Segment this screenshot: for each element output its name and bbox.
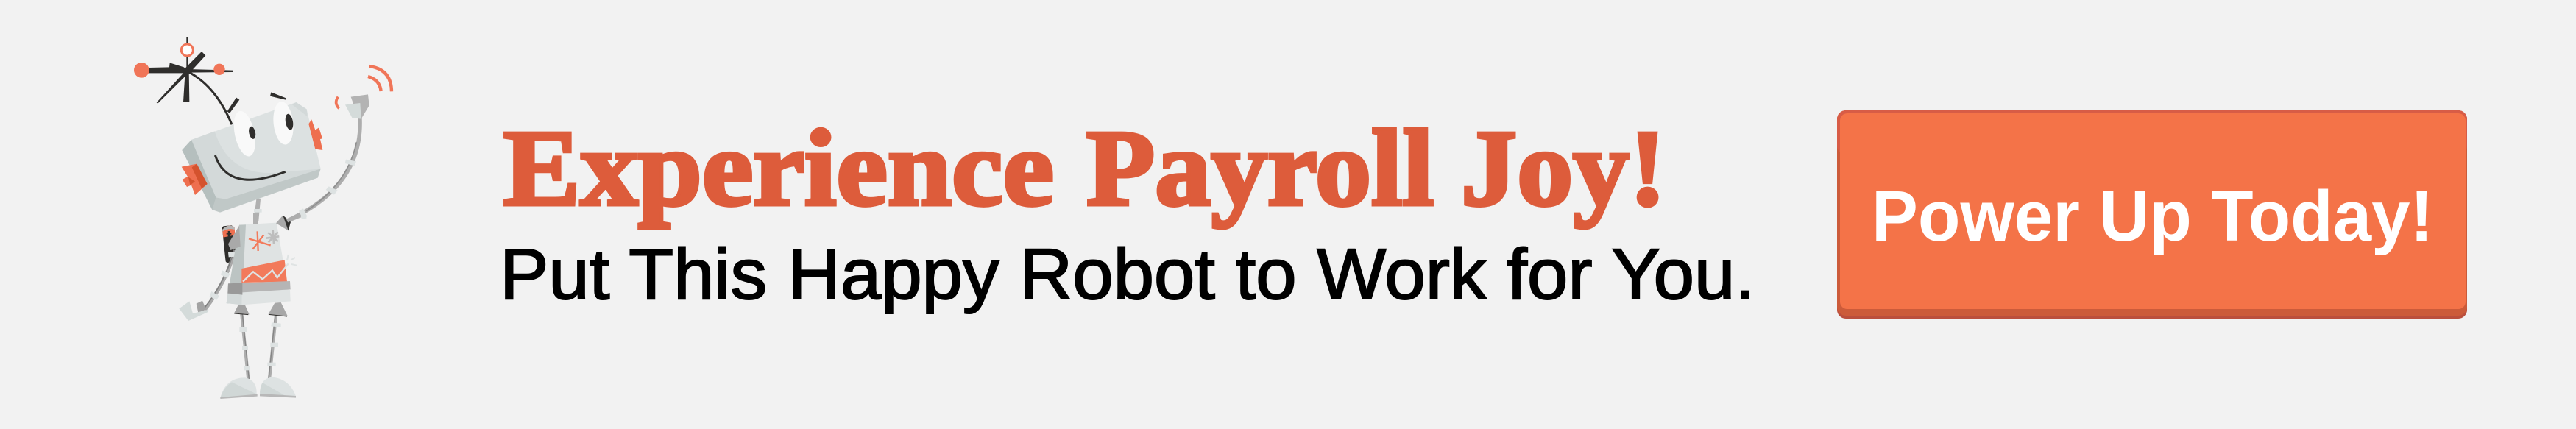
robot illustration bbox=[134, 37, 392, 399]
raised hand bbox=[345, 94, 369, 119]
right ear bbox=[308, 119, 322, 150]
propeller bbox=[134, 37, 239, 124]
left eye bbox=[230, 109, 259, 158]
headline: Payroll bbox=[1086, 108, 1434, 229]
left arm bbox=[179, 250, 236, 321]
robot upper body bbox=[134, 37, 392, 221]
smile bbox=[215, 155, 286, 180]
battery bbox=[222, 225, 236, 263]
right pupil bbox=[284, 113, 294, 130]
right leg bbox=[260, 302, 296, 398]
call to action button bbox=[1837, 110, 2467, 319]
chest gear bbox=[266, 230, 279, 244]
robot lower body bbox=[179, 213, 307, 399]
neck bbox=[253, 213, 258, 224]
left leg bbox=[220, 305, 258, 399]
right shoulder bbox=[276, 213, 307, 230]
torso bbox=[227, 223, 297, 305]
eyebrow bbox=[270, 92, 286, 100]
headline bbox=[503, 108, 1666, 229]
chest asterisk bbox=[249, 231, 271, 251]
subheading: Put This Happy Robot to Work for You. bbox=[500, 234, 1755, 314]
neck joint bbox=[254, 199, 262, 221]
signal waves bbox=[336, 66, 392, 108]
headline: Experience bbox=[503, 108, 1054, 229]
right eye bbox=[272, 101, 295, 146]
button label: Power Up Today! bbox=[1872, 176, 2433, 256]
head bbox=[182, 101, 321, 213]
raised arm bbox=[287, 118, 360, 221]
headline: Joy! bbox=[1461, 108, 1666, 229]
left ear bbox=[182, 164, 208, 195]
left pupil bbox=[248, 126, 257, 140]
